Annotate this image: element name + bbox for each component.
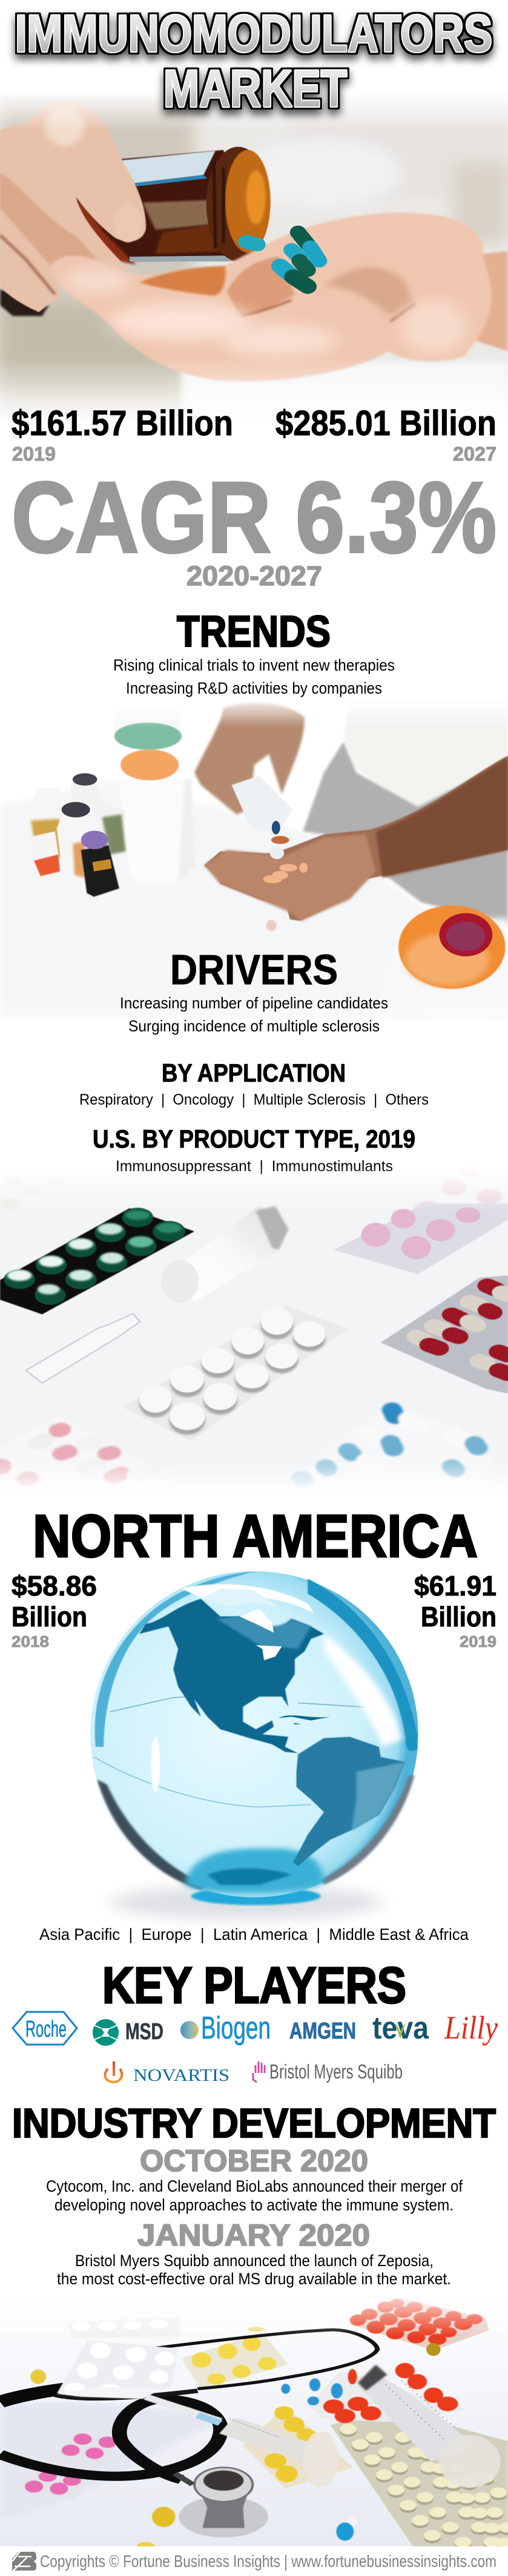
logo: Teva: teva [372, 2011, 429, 2046]
main title: MARKET [163, 60, 347, 118]
logo: Biogen [180, 2011, 271, 2046]
North America 2018 value [12, 1570, 97, 1651]
date: October 2020: OCTOBER 2020 [140, 2144, 368, 2178]
regions list: Asia Pacific | Europe | Latin America | Middle East & Africa [39, 1925, 469, 1944]
North America 2019 value: 2019 [460, 1632, 496, 1651]
development text 1 [46, 2177, 463, 2214]
North America 2018 value: 2018 [12, 1632, 49, 1651]
photo: stethoscope, syringes and medicine [0, 2284, 508, 2551]
product type list: Immunosuppressant | Immunostimulants [116, 1158, 393, 1175]
heading: U.S. by product type: U.S. BY PRODUCT TYPE, 2019 [93, 1125, 415, 1153]
trends text: Rising clinical trials to invent new therapies [113, 656, 395, 674]
drivers text [120, 994, 388, 1035]
footer logo [12, 2551, 36, 2572]
logo: Bristol Myers Squibb [253, 2060, 403, 2083]
market size 2027: 2027 [453, 443, 496, 465]
North America 2018 value: Billion [12, 1601, 87, 1632]
main title [15, 5, 492, 118]
logo: Biogen: Biogen [201, 2011, 271, 2046]
development text 2: the most cost-effective oral MS drug available in the market. [57, 2270, 451, 2288]
drivers text: Increasing number of pipeline candidates [120, 994, 388, 1012]
market size 2019: $161.57 Billion [12, 404, 233, 443]
hero photo: hands pouring capsules from a bottle [0, 81, 508, 432]
logo: Novartis [105, 2062, 229, 2085]
logo: Amgen: AMGEN [289, 2019, 356, 2044]
globe illustration [90, 1571, 418, 1920]
market size 2019: 2019 [12, 443, 56, 465]
logo: MSD [93, 2019, 163, 2046]
North America 2019 value [414, 1570, 496, 1651]
North America 2019 value: $61.91 [414, 1570, 496, 1602]
footer band [0, 2546, 508, 2576]
photo: blister packs and vial [0, 1160, 508, 1502]
logo: Roche [13, 2012, 77, 2045]
heading: by application: BY APPLICATION [162, 1059, 346, 1087]
trends text [113, 656, 395, 697]
development text 1: developing novel approaches to activate the immune system. [54, 2196, 454, 2214]
logo: MSD: MSD [125, 2019, 163, 2045]
heading: trends: TRENDS [177, 608, 331, 656]
heading: drivers: DRIVERS [170, 946, 338, 993]
application list: Respiratory | Oncology | Multiple Sclerosis | Others [79, 1091, 429, 1108]
development text 2: Bristol Myers Squibb announced the launch of Zeposia, [75, 2252, 434, 2270]
heading: key players: KEY PLAYERS [102, 1957, 406, 2014]
logo: Lilly: Lilly [444, 2009, 498, 2046]
photo: hand pouring pills with bottles [3, 702, 508, 1008]
North America 2018 value: $58.86 [12, 1570, 97, 1602]
trends text: Increasing R&D activities by companies [126, 679, 382, 697]
logo: Bristol Myers Squibb: Bristol Myers Squibb [269, 2060, 403, 2083]
North America 2019 value: Billion [421, 1601, 496, 1632]
development text 2 [57, 2252, 451, 2288]
drivers text: Surging incidence of multiple sclerosis [128, 1017, 380, 1035]
date: January 2020: JANUARY 2020 [137, 2218, 370, 2252]
market size 2027 [275, 404, 496, 465]
logo: Roche: Roche [25, 2017, 67, 2042]
market size 2019 [12, 404, 233, 465]
development text 1: Cytocom, Inc. and Cleveland BioLabs announced their merger of [46, 2177, 463, 2195]
CAGR period: 2020-2027 [186, 560, 322, 591]
logo: Novartis: NOVARTIS [133, 2066, 229, 2085]
